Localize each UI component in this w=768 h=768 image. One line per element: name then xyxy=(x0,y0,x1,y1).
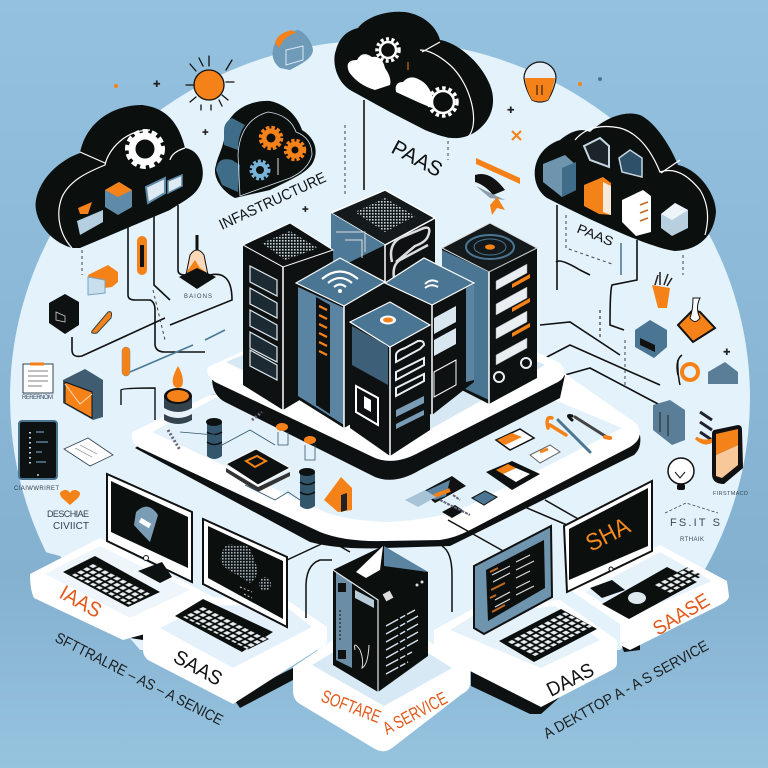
label: desktop as a service caption: A DEKTTOP A - A S SERVICE xyxy=(541,637,712,742)
icon: orange tube xyxy=(137,236,147,275)
label: software as a service caption: SFTTRALRE – AS – A SENICE xyxy=(52,629,226,729)
label: describe xyxy=(47,509,89,532)
icon: black folder xyxy=(486,461,540,490)
label: FS IT S: FS.IT S xyxy=(670,517,720,529)
bottom block: SAAS xyxy=(143,597,327,708)
label: DAAS: DAAS xyxy=(543,659,598,701)
connector cables under platform xyxy=(287,500,580,618)
monitor: IAAS xyxy=(107,474,192,583)
label: PAAS large: PAAS xyxy=(388,136,446,182)
server: front xyxy=(350,302,430,456)
icon: folder xyxy=(88,265,118,290)
bottom block: DAAS xyxy=(434,600,617,714)
sparkle accents: ✚ xyxy=(153,79,161,89)
icon: tablet list xyxy=(19,421,57,479)
icon: card small xyxy=(530,445,560,463)
bottom block: Software xyxy=(293,640,470,751)
keyboard: SAASE xyxy=(602,567,703,619)
label: reference: RERERNOM xyxy=(22,395,53,401)
icon: rack tower xyxy=(653,400,685,445)
label: IAAS: IAAS xyxy=(56,581,105,623)
server: middle right xyxy=(385,258,474,415)
monitor: SAAS xyxy=(203,519,287,627)
lower platform items right xyxy=(405,416,610,518)
sparkle accents: ✚ xyxy=(302,205,309,214)
icon: wireless bracket xyxy=(475,158,520,215)
sparkle accents: ✚ xyxy=(202,128,209,137)
icon: orange posts xyxy=(276,423,316,444)
label: BAIONS: BAIONS xyxy=(184,294,212,300)
icon: plant pot xyxy=(652,272,672,308)
keyboard: DAAS xyxy=(499,609,597,662)
keyboard: SAAS xyxy=(175,599,273,652)
server: back left with grid top xyxy=(243,223,333,410)
icon: blue wedge xyxy=(422,476,466,503)
label: Firstmacd: FIRSTMACD xyxy=(713,491,748,497)
right side icons xyxy=(635,272,743,490)
icon: hourglass flask xyxy=(179,235,216,289)
server box: software xyxy=(333,546,428,692)
label: SAASE: SAASE xyxy=(649,589,714,640)
server slots xyxy=(250,266,277,380)
label: Software a service: A SERVICE xyxy=(379,688,451,739)
keyboard: IAAS xyxy=(63,556,160,607)
icon: sun xyxy=(186,56,234,110)
small blue cloud icon xyxy=(273,30,313,70)
dial xyxy=(466,235,514,259)
icon: capsule xyxy=(92,312,112,333)
icon: orange mark xyxy=(512,131,521,140)
cloud: top centre xyxy=(334,12,493,138)
connector lines xyxy=(72,100,683,420)
icon: notes panel xyxy=(22,364,53,401)
label: PAAS small: PAAS xyxy=(575,221,616,249)
icon: light bulb orange xyxy=(524,62,556,102)
sparkle accents: ✚ xyxy=(507,105,515,115)
orange and blue gears xyxy=(251,128,304,179)
lower platform items left xyxy=(168,412,352,512)
label: FS IT S xyxy=(665,503,720,543)
icon: light bulb outline xyxy=(668,458,694,490)
icon: black tablet with D xyxy=(226,449,290,492)
label: SHA: SHA xyxy=(581,512,635,557)
server: right xyxy=(442,223,537,404)
label: Software a service: SOFTARE xyxy=(319,686,384,727)
icon: database stack 2 xyxy=(299,468,315,509)
icon: orange at symbol xyxy=(678,360,698,385)
icon: orange envelope xyxy=(63,369,103,420)
icon: tools xyxy=(547,416,610,452)
cloud: left with gear xyxy=(36,105,203,248)
mini servers xyxy=(105,182,132,215)
server: back centre xyxy=(331,190,435,300)
drive bays xyxy=(496,264,527,365)
label: SAAS: SAAS xyxy=(170,646,226,691)
icon: card orange xyxy=(496,429,534,450)
bottom block: SAASE xyxy=(570,545,729,652)
icon: flask diamond xyxy=(678,298,715,342)
gears xyxy=(377,39,457,116)
icon: paper xyxy=(64,438,113,466)
server: wifi xyxy=(296,258,385,428)
mesh vent xyxy=(355,198,415,232)
icon: cork screw xyxy=(700,412,712,440)
icon: database stack 1 xyxy=(206,418,222,459)
icon: heart xyxy=(60,490,80,505)
label: Software a service xyxy=(319,686,451,739)
icon: small pad xyxy=(472,491,497,505)
label: Infrastructure: INFASTRUCTURE xyxy=(217,169,329,234)
bottom block: IAAS xyxy=(30,538,215,640)
mini racks xyxy=(543,155,576,197)
white mini cloud xyxy=(348,54,390,90)
label: describe: DESCHIAE xyxy=(47,509,89,519)
icon: database with flame xyxy=(164,366,192,424)
window panel xyxy=(386,610,418,674)
cloud: infrastructure gears xyxy=(215,101,316,198)
icon: orange bar xyxy=(122,347,130,376)
sparkle accents xyxy=(114,77,731,357)
gear xyxy=(128,132,162,166)
icon: rack cube xyxy=(635,320,667,358)
label: describe: CIVIICT xyxy=(53,521,89,532)
pale circular backdrop xyxy=(10,42,750,650)
wifi icon xyxy=(322,272,358,287)
cloud: right PaaS xyxy=(535,114,716,251)
icon: small devices left xyxy=(49,236,147,376)
monitor: SHA xyxy=(564,481,652,598)
icon: rack small xyxy=(708,362,738,384)
sparkle accents: ✚ xyxy=(723,347,731,357)
icon: cube xyxy=(49,294,79,334)
monitor: DAAS xyxy=(474,526,552,634)
upper platform xyxy=(207,330,565,480)
icon: orange house xyxy=(324,477,352,512)
label: FS IT S: RTHAIK xyxy=(680,537,704,543)
orange slots xyxy=(319,306,327,355)
icon: orange phone xyxy=(712,425,743,484)
label: caption left: CIAIWWRIRET xyxy=(14,486,59,492)
lower platform xyxy=(132,370,640,548)
